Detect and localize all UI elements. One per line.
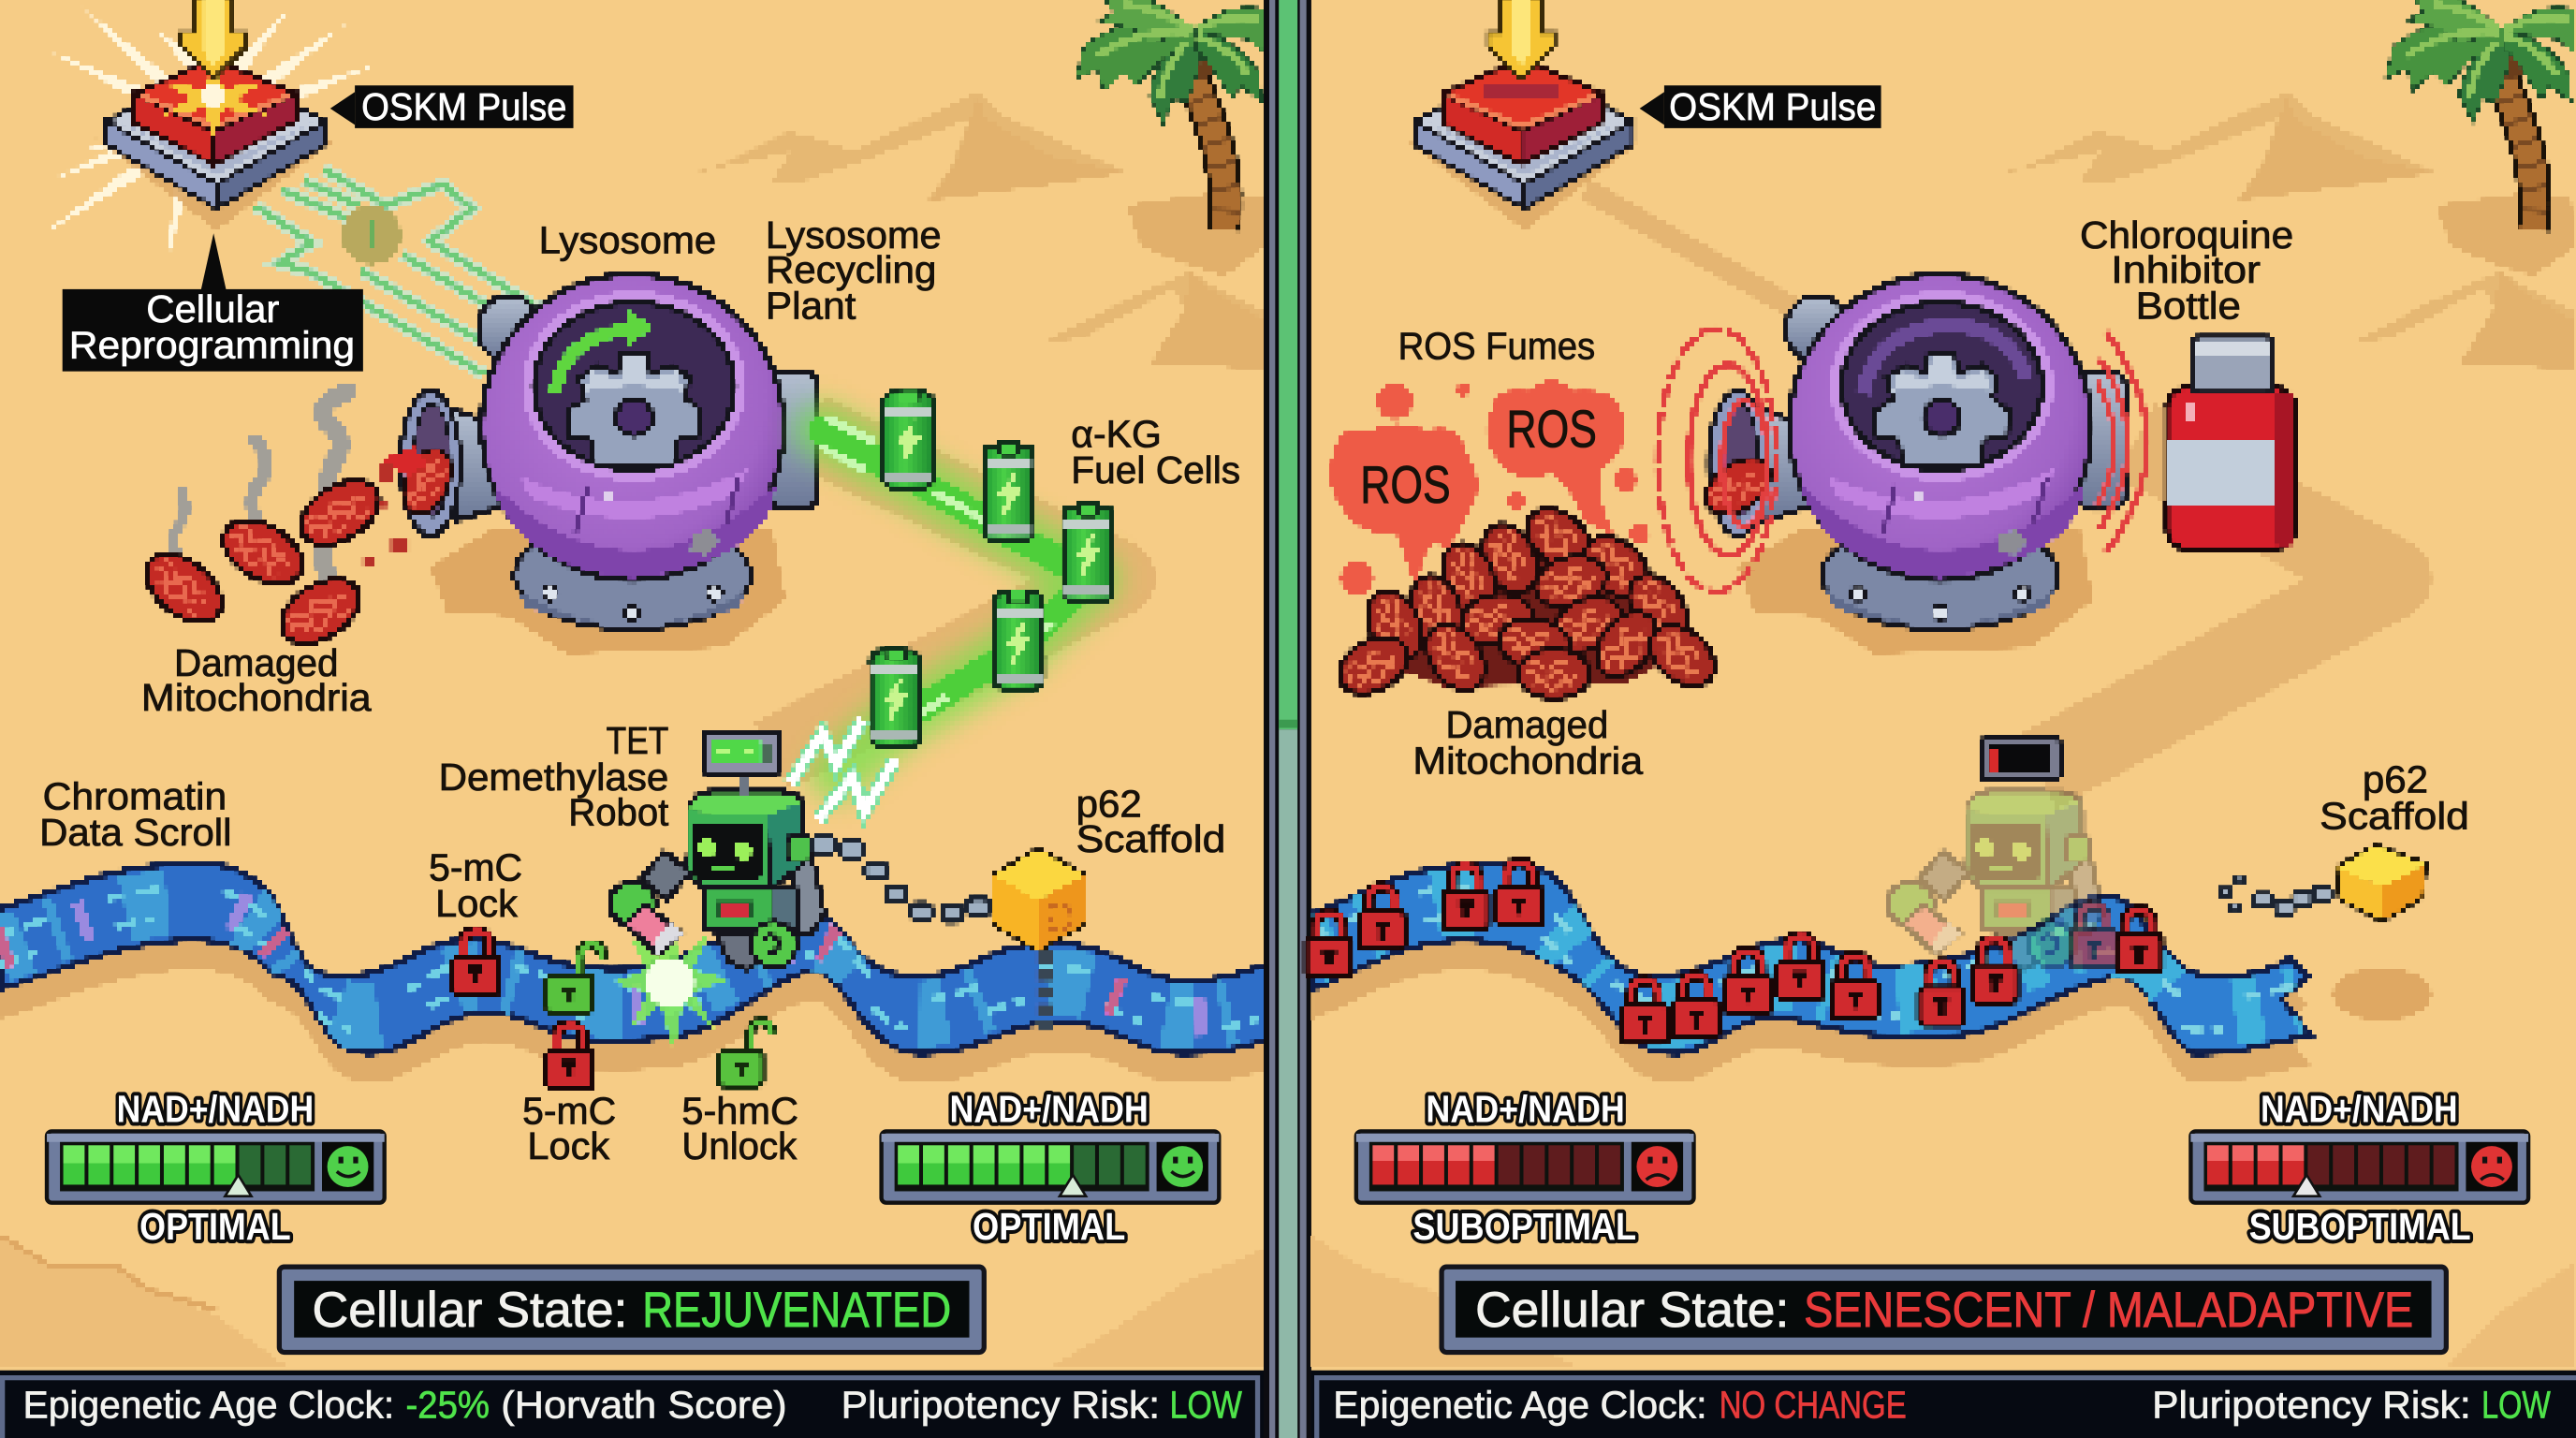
fuel road left [772,431,1117,756]
green energy stream [822,419,1092,772]
gauge: NAD+/NADH right 1 [1356,1088,1694,1248]
metrics bar right: Pluripotency Risk: [2152,1384,2471,1427]
label: 5-mC Lock lower: Lock [527,1124,610,1167]
lysosome machine blocked right [1695,274,2126,654]
label: Chloroquine Inhibitor Bottle: Chloroquine [2080,213,2293,257]
label: p62 Scaffold left: Scaffold [1076,817,1225,860]
gauge: NAD+/NADH left 1: OPTIMAL [139,1205,291,1248]
metrics bar right [1311,1371,2576,1438]
mitochondrion entering intake [381,442,461,521]
label: Damaged Mitochondria left: Damaged [174,641,339,684]
methylation locks left [453,932,772,1088]
label: Lysosome Recycling Plant [766,213,942,327]
label: Chloroquine Inhibitor Bottle: Bottle [2136,284,2241,327]
metrics bar left: (Horvath Score) [501,1384,787,1427]
gauge: NAD+/NADH left 1: NAD+/NADH [117,1088,314,1131]
status panel: Cellular State Senescent: Cellular State: [1475,1283,1789,1338]
label: alpha-KG Fuel Cells [1071,412,1240,492]
recycling arrow [555,309,654,394]
ROS cloud text: ROS [1360,455,1451,514]
label: Damaged Mitochondria right: Damaged [1445,703,1608,746]
palm tree right [2385,0,2576,230]
panel: senescent cell (right) [1306,0,2576,1438]
label: TET Demethylase Robot [439,719,668,834]
label: Lysosome Recycling Plant: Recycling [766,248,936,291]
label: Chloroquine Inhibitor Bottle: Inhibitor [2111,248,2261,291]
stalled rotation mark [1863,326,2027,394]
ROS cloud text: ROS [1506,399,1597,458]
OSKM button right [1403,59,1645,230]
smoke wisps [174,391,348,579]
label: TET Demethylase Robot: Robot [568,791,668,834]
metrics bar right: NO CHANGE [1720,1384,1907,1427]
mitochondrion stuck in intake [1695,448,1780,525]
status panel: Cellular State Rejuvenated: Cellular State: [312,1283,627,1338]
starburst pulse flash [44,7,373,261]
label: 5-hmC Unlock: 5-hmC [681,1089,798,1132]
label: Chromatin Data Scroll [39,775,231,854]
metrics bar left: Epigenetic Age Clock: [23,1384,394,1427]
label: Damaged Mitochondria right: Mitochondria [1412,740,1644,783]
chromatin data scroll left [0,863,1265,1083]
label: TET Demethylase Robot: Demethylase [439,756,668,799]
lysosome recycling machine left [381,274,818,654]
label: ROS Fumes: ROS Fumes [1398,324,1595,367]
metrics bar left: -25% [406,1384,490,1427]
red inhibition rings [1658,329,2147,592]
label: Chloroquine Inhibitor Bottle [2080,213,2293,327]
desert dunes right [1311,92,2576,1367]
Cellular Reprogramming label: Cellular [146,287,279,330]
broken chain [2221,875,2331,914]
gauge: NAD+/NADH left 2: OPTIMAL [973,1205,1125,1248]
pulse arrow left [181,0,246,79]
gauge: NAD+/NADH right 1: SUBOPTIMAL [1412,1205,1636,1248]
status panel: Cellular State Senescent: SENESCENT / MALADAPTIVE [1804,1283,2413,1338]
inactive faded robot [1888,788,2103,970]
p62 scaffold cube right [2338,846,2425,920]
green circuit trace [255,169,546,374]
label: 5-mC Lock lower: 5-mC [522,1089,616,1132]
hanging chain [1040,949,1049,1032]
gauge: NAD+/NADH right 1: NAD+/NADH [1426,1088,1625,1131]
scene art: senescent pathway [1306,0,2576,1367]
robot antenna and battery [703,731,781,795]
label: 5-mC Lock lower [522,1089,616,1167]
empty scaffold spot shadow [2333,968,2432,1020]
metrics bar right: LOW [2481,1384,2551,1427]
metrics bar right: Epigenetic Age Clock: [1333,1384,1707,1427]
ROS cloud text [1360,399,1597,514]
label: alpha-KG Fuel Cells: α-KG [1071,412,1162,455]
pulse arrow right [1488,0,1554,79]
OSKM Pulse label left: OSKM Pulse [361,85,567,128]
gauge: NAD+/NADH right 2: NAD+/NADH [2261,1088,2458,1131]
damaged mitochondria left [134,468,390,656]
TET demethylase robot [609,731,825,970]
label: 5-hmC Unlock: Unlock [681,1124,798,1167]
gauge: NAD+/NADH left 1 [47,1088,385,1248]
label: 5-mC Lock upper: 5-mC [429,846,522,889]
label: Lysosome Recycling Plant: Lysosome [766,213,942,257]
demethylation spark [611,920,729,1051]
label: Lysosome: Lysosome [539,218,716,261]
scene art: rejuvenated pathway [0,0,1268,1367]
label: Lysosome Recycling Plant: Plant [766,284,856,327]
ROS clouds [1330,380,1649,594]
red debris [363,465,409,565]
label: 5-hmC Unlock [681,1089,798,1167]
dusty road right [1586,189,2391,772]
label: Damaged Mitochondria left [141,641,372,719]
label: p62 Scaffold left: p62 [1076,782,1142,825]
Cellular Reprogramming label [63,233,363,372]
methylation locks right [1306,862,2162,1043]
label: 5-mC Lock upper [429,846,522,925]
label: Chromatin Data Scroll: Chromatin [43,775,227,818]
label: 5-mC Lock upper: Lock [435,882,519,925]
label: TET Demethylase Robot: TET [607,719,668,762]
label: Chromatin Data Scroll: Data Scroll [39,811,231,854]
alpha-KG fuel cell batteries [871,389,1112,746]
metrics bar left [0,1371,1265,1438]
label: p62 Scaffold right: Scaffold [2320,795,2469,838]
lightning bolts [790,720,896,820]
p62 scaffold cube left [994,849,1084,949]
status panel: Cellular State Rejuvenated [279,1267,984,1352]
chain to scaffold [813,836,1016,922]
status panel: Cellular State Rejuvenated: REJUVENATED [642,1283,951,1338]
metrics bar left: Pluripotency Risk: [842,1384,1160,1427]
OSKM Pulse label right: OSKM Pulse [1669,85,1876,128]
gauge: NAD+/NADH left 2: NAD+/NADH [949,1088,1149,1131]
label: p62 Scaffold left [1076,782,1225,860]
label: Damaged Mitochondria left: Mitochondria [141,676,372,719]
chloroquine inhibitor bottle [2167,337,2295,549]
gauge: NAD+/NADH right 2 [2190,1088,2528,1248]
desert dunes left [0,92,1265,1367]
chromatin scroll right torn [1312,862,2310,1083]
panel: rejuvenated cell (left) [0,0,1268,1438]
label: p62 Scaffold right [2320,757,2469,838]
OSKM button left [95,59,337,230]
label: alpha-KG Fuel Cells: Fuel Cells [1071,448,1240,492]
palm tree left [1076,0,1268,230]
Cellular Reprogramming label: Reprogramming [69,324,355,367]
dead battery indicator [1982,738,2060,781]
metrics bar left: LOW [1170,1384,1242,1427]
status panel: Cellular State Senescent [1442,1267,2446,1352]
labels and HUD: senescent panel [1311,85,2576,1438]
labels and HUD: rejuvenated panel [0,85,1265,1438]
center divider [1264,0,1311,1438]
gauge: NAD+/NADH left 2 [882,1088,1219,1248]
damaged mitochondria pile [1330,497,1726,705]
label: p62 Scaffold right: p62 [2363,757,2428,800]
gauge: NAD+/NADH right 2: SUBOPTIMAL [2249,1205,2471,1248]
label: Damaged Mitochondria right [1412,703,1644,783]
